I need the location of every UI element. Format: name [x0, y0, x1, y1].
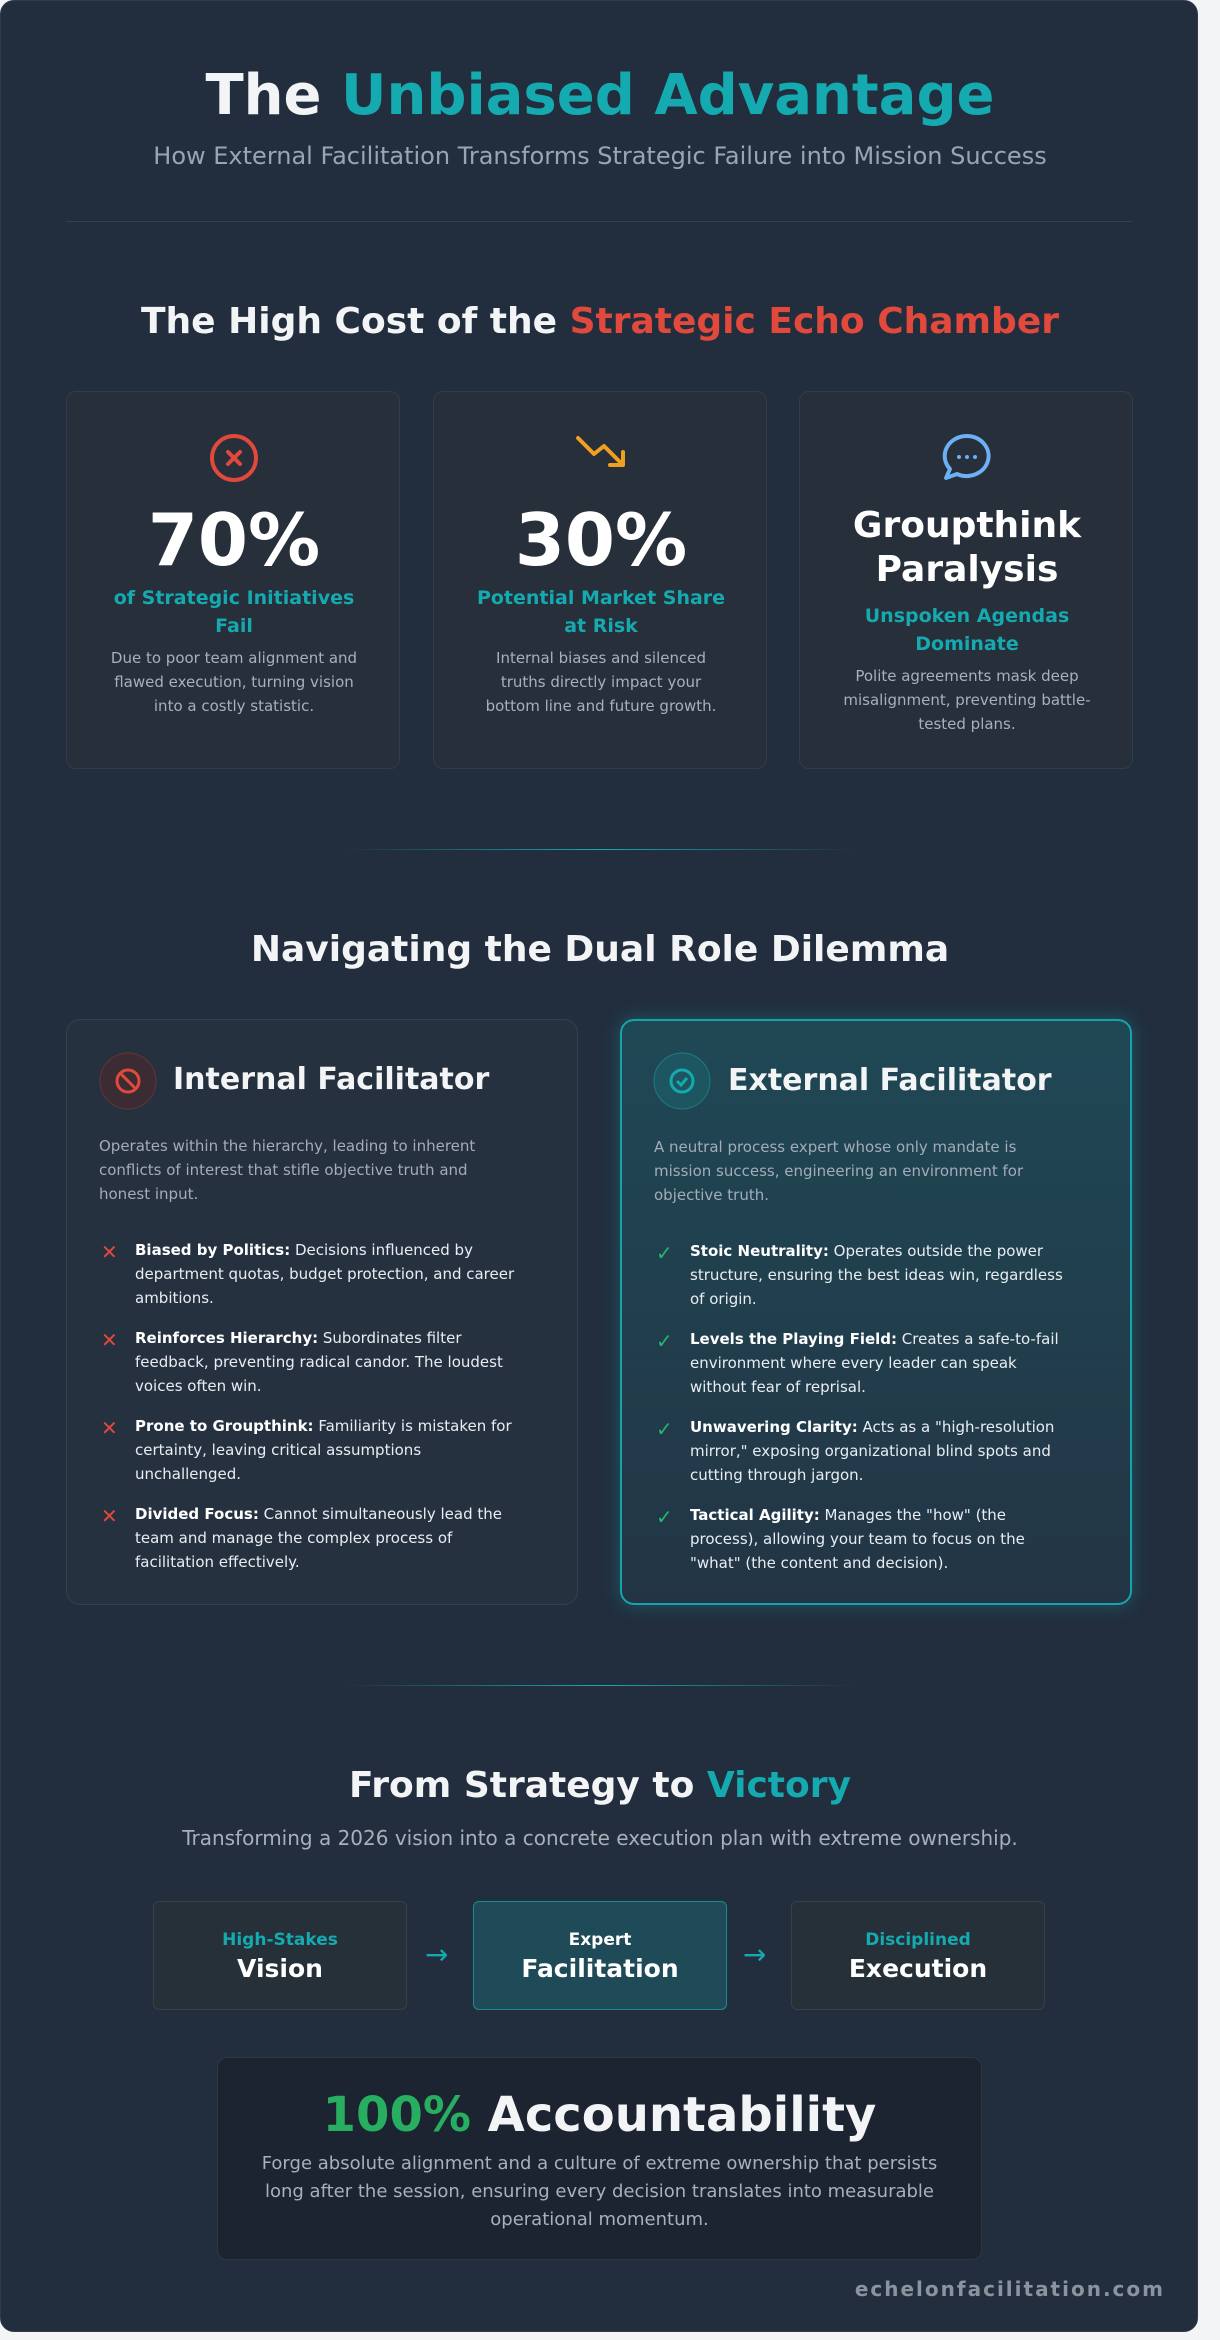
arrow: → [743, 1938, 766, 1971]
panel: internal: Internal Facilitator [173, 1062, 489, 1097]
card: 70%: Due to poor team alignment and flawed execution, turning vision into a costly statistic. [111, 649, 357, 715]
callout: accountability [217, 2057, 982, 2260]
arrow: → [425, 1938, 448, 1971]
panel: internal: Operates within the hierarchy, leading to inherent conflicts of interest that stifle objective truth and honest input. [99, 1137, 475, 1203]
card: 30%: Internal biases and silenced truths directly impact your bottom line and future growth. [486, 649, 716, 715]
icon: ban [100, 1052, 156, 1110]
card: groupthink: Polite agreements mask deep misalignment, preventing battle-tested plans. [843, 667, 1091, 733]
list: external benefits: ✓ [656, 1417, 673, 1441]
list: external benefits: Stoic Neutrality: Operates outside the power structure, ensuring the best ideas win, regardless of origin. [690, 1242, 1063, 1308]
heading: echo chamber: The High Cost of the Strategic Echo Chamber [141, 301, 1059, 342]
heading: victory: From Strategy to Victory [349, 1765, 851, 1806]
list: external benefits [656, 1241, 1063, 1572]
callout: accountability: 100% Accountability [323, 2087, 876, 2143]
card: 30%: 30% [515, 498, 687, 582]
flow: execution: Disciplined [865, 1930, 971, 1950]
card: 70%: 70% [148, 498, 320, 582]
card: 30% [433, 391, 767, 769]
list: internal drawbacks: Reinforces Hierarchy: Subordinates filter feedback, preventing radical candor. The loudest voices often win. [135, 1329, 503, 1395]
card: 30%: Potential Market Share at Risk [477, 587, 725, 637]
flow: vision: Vision [237, 1954, 323, 1983]
card: 70%: of Strategic Initiatives Fail [114, 587, 354, 637]
icon: x circle [210, 434, 258, 482]
panel: internal [66, 1019, 578, 1605]
list: internal drawbacks: Prone to Groupthink: Familiarity is mistaken for certainty, leaving critical assumptions unchallenged. [135, 1417, 512, 1483]
flow: vision: High-Stakes [222, 1930, 338, 1950]
heading: dual role: Navigating the Dual Role Dilemma [251, 929, 949, 970]
icon: trending down [576, 436, 625, 467]
list: internal drawbacks: ✕ [101, 1504, 118, 1528]
flow: execution: Execution [849, 1954, 987, 1983]
list: external benefits: ✓ [656, 1329, 673, 1353]
card: groupthink [799, 391, 1133, 769]
flow: facilitation [473, 1901, 727, 2010]
subtitle: How External Facilitation Transforms Strategic Failure into Mission Success [153, 142, 1047, 170]
list: external benefits: ✓ [656, 1505, 673, 1529]
subtitle: victory: Transforming a 2026 vision into a concrete execution plan with extreme ownership. [182, 1826, 1018, 1850]
title: The Unbiased Advantage [205, 63, 995, 128]
list: external benefits: ✓ [656, 1241, 673, 1265]
flow: vision [153, 1901, 407, 2010]
panel: external: External Facilitator [728, 1063, 1052, 1098]
panel: external [620, 1019, 1132, 1605]
card: groupthink: Groupthink Paralysis [853, 505, 1081, 590]
list: external benefits: Unwavering Clarity: Acts as a "high-resolution mirror," exposing organizational blind spots and cutting through jargon. [690, 1418, 1054, 1484]
icon: chat bubble [942, 434, 991, 480]
list: external benefits: Tactical Agility: Manages the "how" (the process), allowing your team to focus on the "what" (the content and decision). [690, 1506, 1025, 1572]
footer: echelonfacilitation.com [855, 2277, 1165, 2301]
list: internal drawbacks: ✕ [101, 1416, 118, 1440]
icon: check [654, 1052, 710, 1110]
list: internal drawbacks: Biased by Politics: Decisions influenced by department quotas, budget protection, and career ambitions. [135, 1241, 514, 1307]
list: internal drawbacks [101, 1240, 514, 1571]
list: internal drawbacks: ✕ [101, 1328, 118, 1352]
card: 70% [66, 391, 400, 769]
callout: accountability: Forge absolute alignment and a culture of extreme ownership that persists long after the session, ensuring every decision translates into measurable operational momentum. [262, 2153, 937, 2230]
flow: facilitation: Facilitation [521, 1954, 679, 1983]
flow: execution [791, 1901, 1045, 2010]
list: internal drawbacks: Divided Focus: Cannot simultaneously lead the team and manage the complex process of facilitation effectively. [135, 1505, 502, 1571]
flow: facilitation: Expert [569, 1930, 631, 1950]
card: groupthink: Unspoken Agendas Dominate [865, 605, 1069, 655]
panel: external: A neutral process expert whose only mandate is mission success, engineering an environment for objective truth. [654, 1138, 1023, 1204]
list: internal drawbacks: ✕ [101, 1240, 118, 1264]
list: external benefits: Levels the Playing Field: Creates a safe-to-fail environment where every leader can speak without fear of reprisal. [690, 1330, 1059, 1396]
